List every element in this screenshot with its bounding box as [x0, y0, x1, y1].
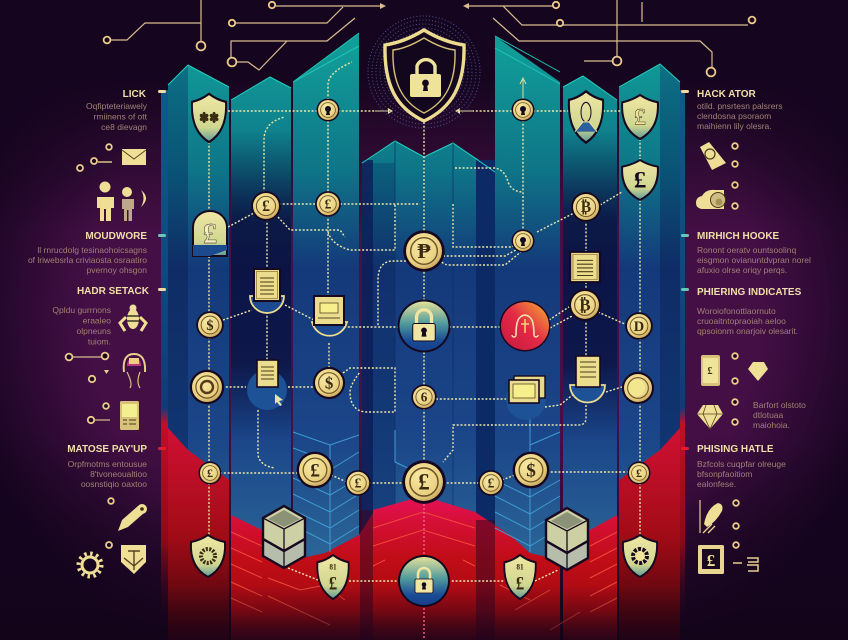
icon: shield F2 pound: [622, 160, 658, 200]
text block: matose: oosnstiqio oaxtoo: [81, 479, 147, 489]
icon: shield pound right: £: [516, 573, 524, 594]
icon: tag: [700, 142, 726, 170]
panel: column F: [619, 64, 680, 640]
panel: column E: [563, 76, 617, 640]
node: bottom lock: [398, 555, 450, 607]
text block: hack ator: otild. pnsrtesn palsrers: [697, 101, 783, 111]
icon: document lower E: [570, 356, 605, 402]
text block: moudwore: pvernoy ohsgon: [86, 265, 147, 275]
panel: column C: [293, 33, 359, 640]
icon: bottom shield gear right: [623, 535, 657, 577]
text block: phising hatle: Bzfcols cuqpfar olreuge: [697, 459, 786, 469]
coin: [478, 470, 504, 496]
tick: [681, 90, 689, 93]
panel: column D: [495, 36, 560, 640]
icon: pound badge: £: [203, 219, 217, 250]
text block: lick: ce8 dievagn: [101, 122, 147, 132]
icon: box right: [546, 508, 588, 570]
coin: [513, 452, 549, 488]
icon: pen: [108, 498, 147, 531]
text block: mirhich hooke: Ronont oeratv ountsoolinq: [697, 245, 797, 255]
icon: circuit dots: [66, 353, 109, 382]
coin: [402, 460, 446, 504]
node: central lock: [398, 300, 450, 352]
icon: diamond: [697, 405, 723, 429]
coin: [571, 192, 601, 222]
tick: [158, 90, 166, 93]
text block: hadr setack: olpneuns: [76, 326, 111, 336]
node: keyhole lower: [512, 230, 534, 252]
panel: right edge strip: [680, 90, 685, 620]
heading: LICK: LICK: [123, 89, 147, 100]
node: keyhole right: [512, 98, 534, 122]
text block: hadr setack: eraaleo: [83, 316, 111, 326]
dotted network lines: [209, 62, 640, 640]
coin: [411, 384, 437, 410]
heading: PHIERING INDICATES: PHIERING INDICATES: [697, 287, 802, 298]
text block: mirhich hooke: eisgmon ovianuntdvpran norel: [697, 255, 811, 265]
coin: D: [634, 319, 644, 335]
text block: phising hatle: bfsonpfaoitiom: [697, 469, 752, 479]
coin: ₿: [581, 199, 591, 216]
icon: headset: [124, 354, 145, 388]
icon: dots phone: [88, 403, 110, 423]
icon: key dots: [77, 144, 112, 171]
coin: [625, 312, 653, 340]
icon: shield A top: [192, 94, 226, 142]
icon: gear: [78, 542, 112, 576]
text block: diamond note: Barfort olstoto: [753, 400, 806, 410]
text block: lick: Oqfipteteriawely: [86, 101, 148, 111]
icon: monitor: [506, 376, 546, 420]
coin: £: [488, 475, 495, 490]
text block: hadr setack: Qpldu gurrnons: [52, 305, 111, 315]
icon: dots: [733, 500, 739, 548]
coin: [622, 372, 654, 404]
icon: shield E person: [569, 91, 603, 143]
heading: HACK ATOR: HACK ATOR: [697, 89, 756, 100]
icon: pound card: £: [707, 551, 715, 570]
coin: £: [636, 466, 642, 480]
heading: MATOSE PAY'UP: MATOSE PAY'UP: [67, 444, 147, 455]
panel: centre column: [362, 141, 495, 640]
icon: document A: [250, 269, 284, 313]
node: keyhole left: [316, 98, 340, 122]
icon: pound card: [698, 545, 724, 574]
coin: [313, 367, 345, 399]
coin: $: [206, 318, 214, 334]
coin: [198, 462, 222, 484]
icon: people: [97, 182, 146, 221]
coin: [196, 311, 224, 339]
tick: [158, 234, 166, 237]
icon: document with cursor: [247, 360, 287, 410]
panel: column A: [168, 65, 229, 640]
icon: pound badge: [193, 211, 227, 256]
panel: red chevron base: [168, 400, 680, 640]
coin: [569, 289, 601, 321]
heading: PHISING HATLE: PHISING HATLE: [697, 444, 774, 455]
coin: $: [325, 374, 333, 393]
coin: £: [325, 196, 332, 211]
text block: moudwore: of lriwebsrla criviaosta osraatiro: [28, 255, 147, 265]
tick: [158, 447, 166, 450]
icon: envelope: [122, 149, 146, 165]
icon: bottom shield gear left: [191, 535, 225, 577]
icon: shield F pound: [622, 95, 658, 139]
icon: phone: [701, 355, 720, 386]
coin: [403, 230, 445, 272]
icon: dots: [732, 353, 738, 425]
icon: shield pound left: £: [329, 573, 337, 594]
icon: box left: [263, 506, 305, 568]
panel: column B: [231, 77, 291, 640]
coin: [315, 191, 341, 217]
icon: shield pound right: 81: [516, 562, 524, 572]
coin: [297, 452, 333, 488]
node: red alert: [500, 300, 550, 352]
icon: rocket: [700, 500, 722, 533]
coin: £: [207, 466, 213, 480]
coin: $: [526, 460, 536, 481]
tick: [681, 447, 689, 450]
text block: hadr setack: tuiom.: [88, 336, 111, 346]
text block: hack ator: maihienn lily olesra.: [697, 121, 772, 131]
panel: left edge strip: [161, 90, 168, 620]
icon: document B: [312, 296, 347, 336]
icon: phone: [120, 401, 139, 430]
text block: matose: 8'tvoneoualtioo: [90, 469, 147, 479]
coin: [345, 470, 371, 496]
tick: [681, 288, 689, 291]
coin: £: [355, 475, 362, 490]
coin: £: [310, 460, 320, 481]
icon: small gem: [748, 362, 768, 381]
coin: ₿: [579, 296, 591, 315]
text block: diamond note: dtlotuaa: [753, 410, 784, 420]
icon: cloud coin: [696, 190, 726, 209]
text block: hack ator: clendosna psoraom: [697, 111, 771, 121]
text block: phiering indicates: cruoaitntopraoiah aeloo: [697, 316, 786, 326]
icon: small shield: [121, 545, 146, 574]
text block: lick: rmiinens of ott: [94, 112, 148, 122]
icon: phone: £: [708, 366, 712, 377]
tick: [158, 288, 166, 291]
coin: 6: [421, 389, 428, 404]
tick: [681, 234, 689, 237]
icon: shield A top: ✽✽: [199, 110, 219, 126]
icon: shield pound right: [504, 555, 536, 599]
icon: shield pound left: 81: [329, 562, 337, 572]
text block: matose: Orpfmotms entousue: [68, 459, 147, 469]
text block: phising hatle: ealonfese.: [697, 479, 736, 489]
coin: [190, 370, 224, 404]
text block: diamond note: maiohoia.: [753, 420, 790, 430]
coin: £: [262, 198, 270, 215]
icon: dash glyph: [733, 558, 758, 571]
panel: left text and icons: [28, 89, 166, 576]
text block: phiering indicates: Woroiofonottlaornuto: [697, 306, 776, 316]
coin: £: [418, 470, 430, 495]
text block: moudwore: ll rnrucdolg tesinaohoicsagns: [37, 245, 147, 255]
top circuit lines: [104, 0, 755, 76]
icon: dots: [732, 143, 738, 209]
coin: [251, 191, 281, 221]
text block: phiering indicates: qpsoionm onarjoiv olesarit.: [697, 326, 798, 336]
heading: MIRHICH HOOKE: MIRHICH HOOKE: [697, 231, 780, 242]
icon: document E: [570, 252, 600, 282]
heading: MOUDWORE: MOUDWORE: [85, 231, 147, 242]
icon: bug: [120, 304, 146, 331]
panel: right text and icons: [681, 89, 811, 574]
icon: shield pound left: [317, 555, 349, 599]
heading: HADR SETACK: HADR SETACK: [77, 286, 150, 297]
coin: ₱: [417, 239, 431, 263]
icon: shield F2 pound: £: [634, 169, 646, 193]
icon: central shield with lock: [368, 16, 480, 128]
text block: mirhich hooke: afuxio olrse oriqy perqs.: [697, 265, 787, 275]
icon: shield F pound: £: [634, 103, 646, 129]
coin: [628, 462, 650, 484]
